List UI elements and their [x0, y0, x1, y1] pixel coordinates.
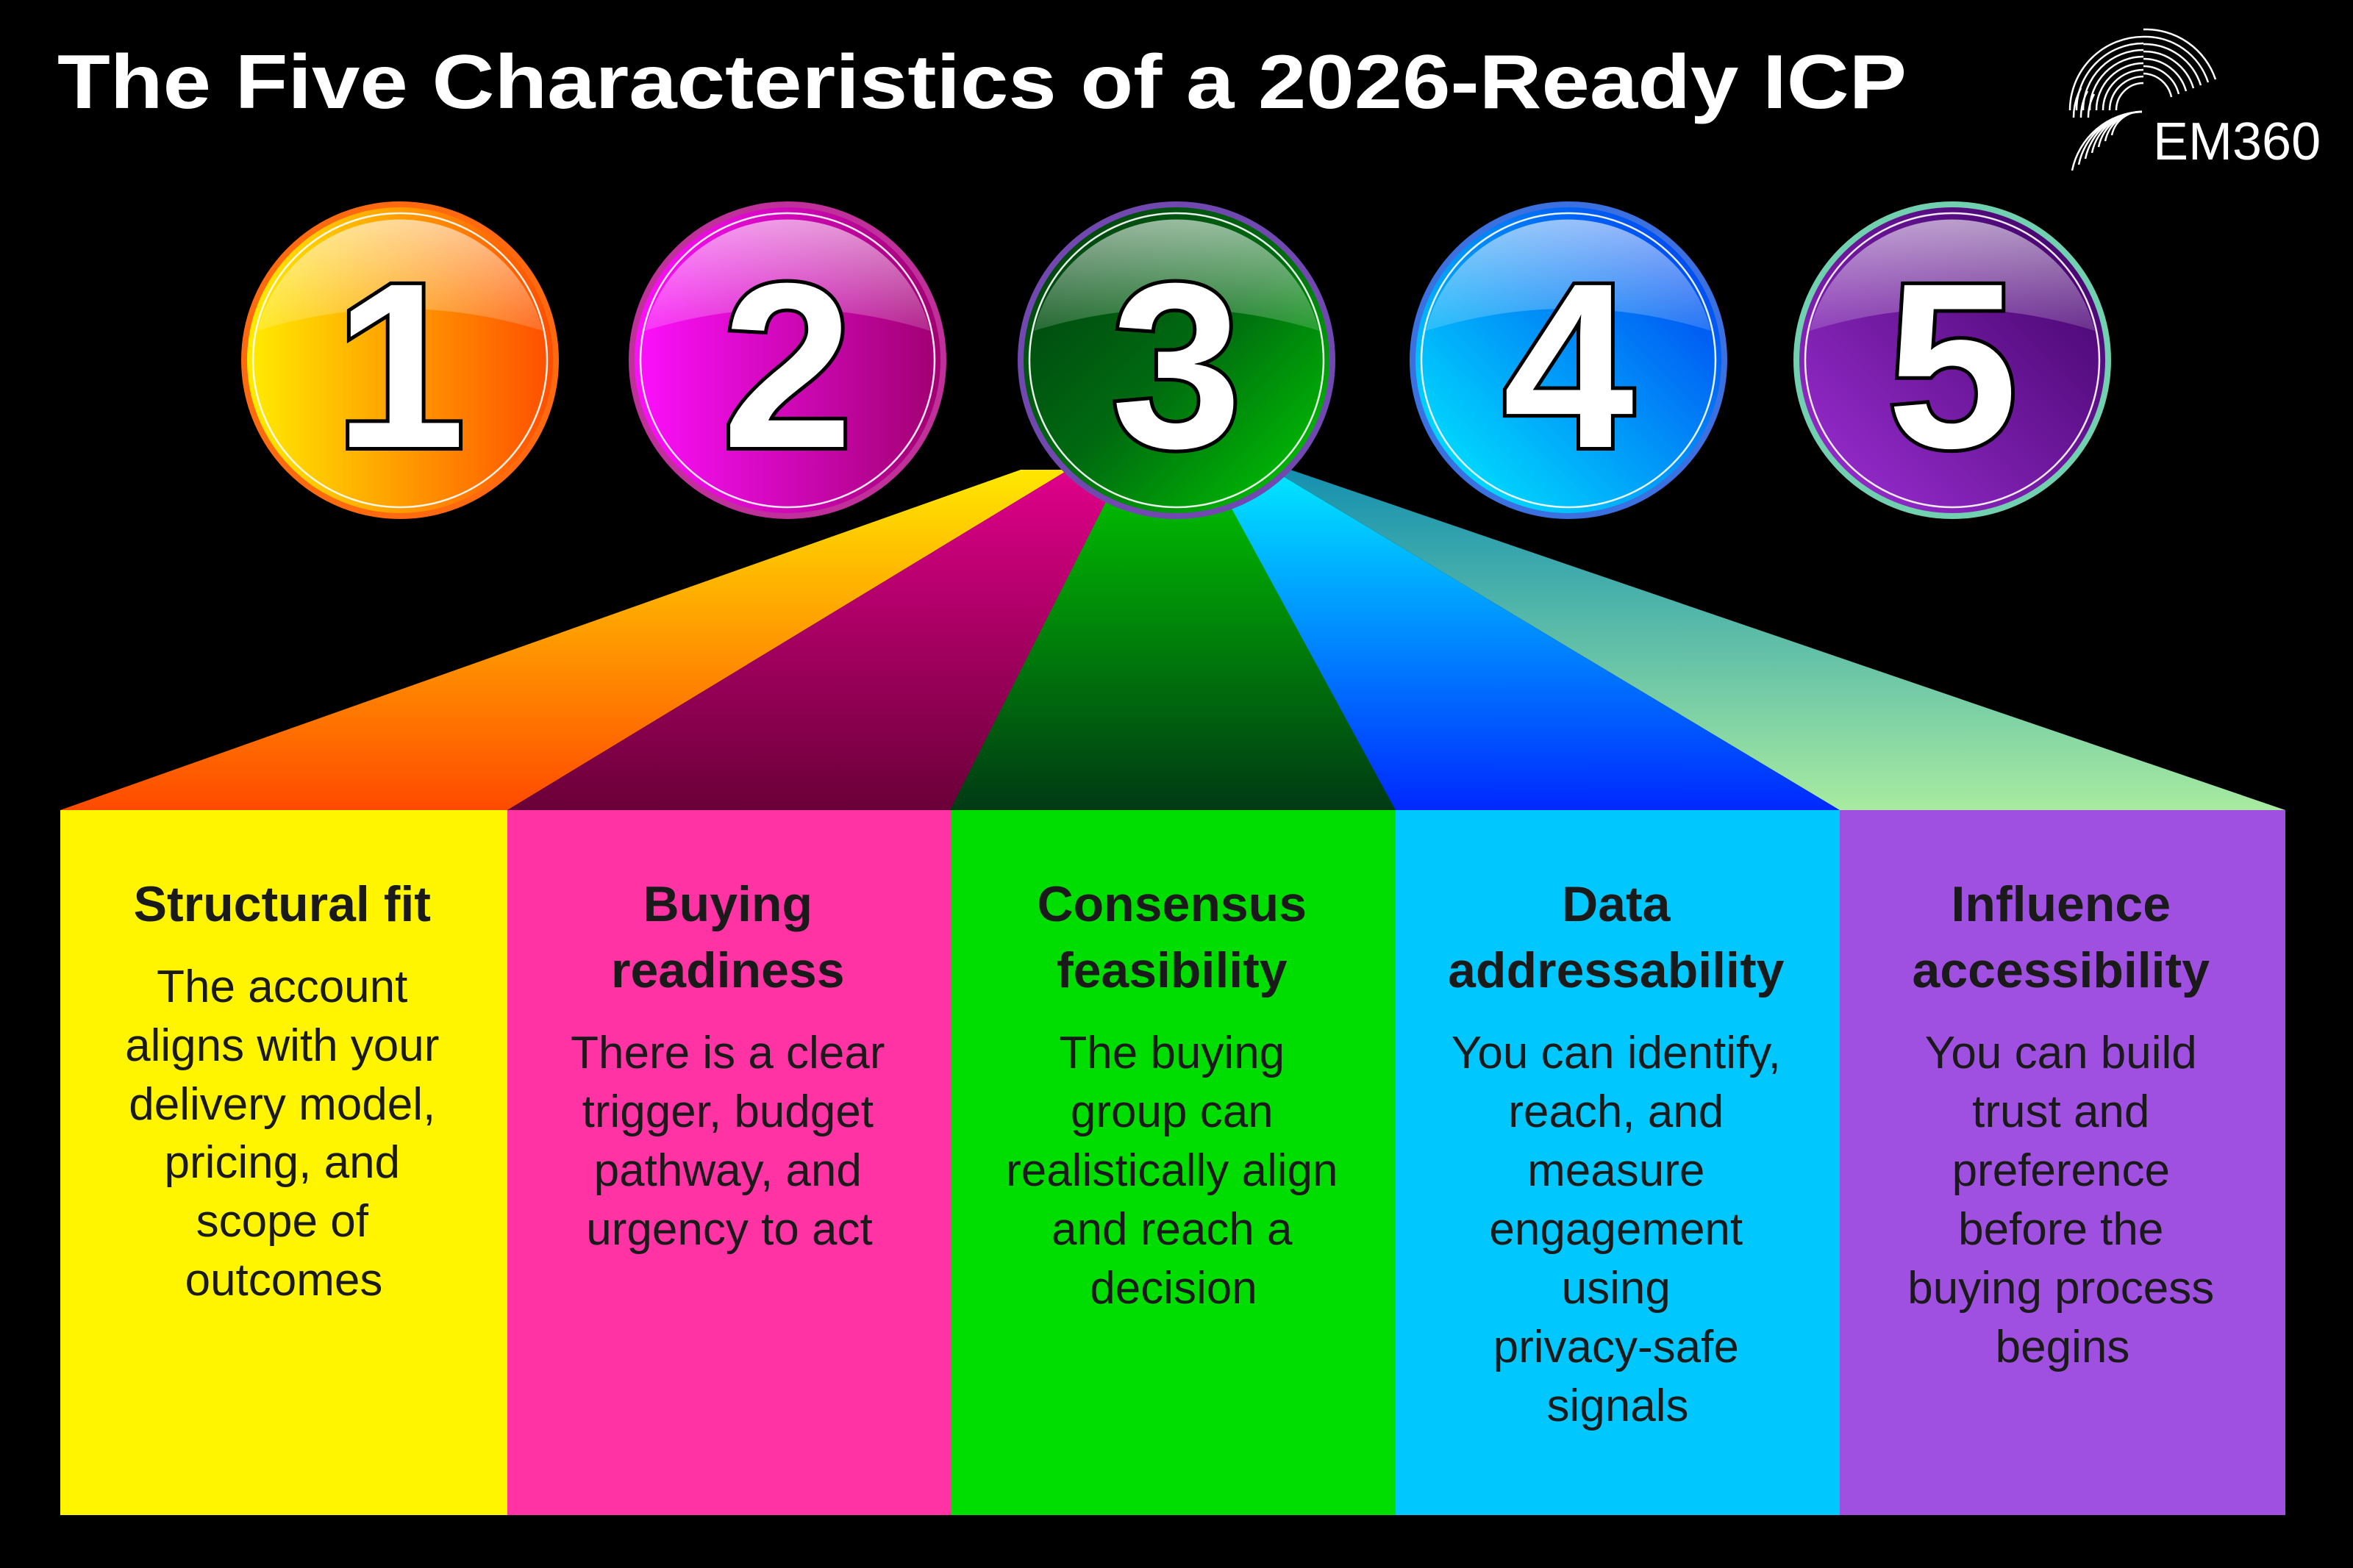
panel 2: Buying readiness: readiness: [611, 942, 845, 998]
panel 1: Structural fit: outcomes: [185, 1255, 382, 1306]
panel 5: Influence accessibility: You can build: [1925, 1028, 2197, 1078]
panel 2: Buying readiness: There is a clear: [571, 1028, 885, 1078]
panel 2: Buying readiness: trigger, budget: [582, 1086, 874, 1137]
panel 1: Structural fit: [60, 810, 507, 1515]
circle 1: 1: [335, 234, 465, 497]
panel 5: Influence accessibility: preference: [1952, 1145, 2170, 1196]
panel 4: Data addressability: measure: [1527, 1145, 1704, 1196]
panel 3: Consensus feasibility: group can: [1071, 1086, 1274, 1137]
circle 1: [244, 204, 556, 516]
panel 4: Data addressability: Data: [1562, 876, 1671, 932]
panel 5: Influence accessibility: begins: [1996, 1322, 2129, 1372]
circle 3: [1021, 204, 1332, 516]
panel 5: Influence accessibility: before the: [1958, 1204, 2163, 1255]
panel 1: Structural fit: delivery model,: [129, 1079, 435, 1130]
beam 2: [507, 470, 1118, 810]
circle 4: [1413, 204, 1724, 516]
panel 2: Buying readiness: Buying: [643, 876, 813, 932]
panel 1: Structural fit: scope of: [196, 1196, 369, 1247]
panel 3: Consensus feasibility: feasibility: [1057, 942, 1288, 998]
panel 3: Consensus feasibility: [951, 810, 1396, 1515]
panel 1: Structural fit: pricing, and: [165, 1137, 400, 1188]
panel 4: Data addressability: privacy-safe: [1493, 1322, 1739, 1372]
panel 3: Consensus feasibility: realistically align: [1006, 1145, 1338, 1196]
panel 4: Data addressability: engagement: [1489, 1204, 1743, 1255]
panel 3: Consensus feasibility: The buying: [1059, 1028, 1285, 1078]
circle 5: [1796, 204, 2108, 516]
panel 3: Consensus feasibility: Consensus: [1038, 876, 1307, 932]
panel 2: Buying readiness: urgency to act: [586, 1204, 873, 1255]
beam 4: [1217, 470, 1840, 810]
beam 3: [950, 482, 1397, 810]
panel 4: Data addressability: signals: [1547, 1381, 1688, 1431]
panel 5: Influence accessibility: buying process: [1907, 1263, 2214, 1314]
panel 2: Buying readiness: [507, 810, 951, 1515]
beam 1: [60, 470, 1068, 810]
panel 5: Influence accessibility: Influence: [1952, 876, 2171, 932]
panel 4: Data addressability: [1396, 810, 1840, 1515]
panel 5: Influence accessibility: accessibility: [1913, 942, 2210, 998]
circle 3: 3: [1111, 234, 1242, 497]
panel 5: Influence accessibility: [1840, 810, 2285, 1515]
beam 5: [1272, 470, 2285, 810]
title: The Five Characteristics of a 2026-Ready ICP: [57, 40, 1907, 125]
logo: EM360: [2070, 29, 2321, 171]
logo: EM360: EM360: [2153, 112, 2321, 171]
panel 1: Structural fit: The account: [157, 962, 407, 1012]
panel 3: Consensus feasibility: decision: [1090, 1263, 1257, 1314]
panel 4: Data addressability: reach, and: [1508, 1086, 1724, 1137]
panel 2: Buying readiness: pathway, and: [594, 1145, 862, 1196]
circle 5: 5: [1887, 234, 2018, 497]
panel 4: Data addressability: using: [1562, 1263, 1671, 1314]
panel 3: Consensus feasibility: and reach a: [1051, 1204, 1293, 1255]
circle 2: 2: [722, 234, 853, 497]
panel 4: Data addressability: You can identify,: [1452, 1028, 1781, 1078]
panel 4: Data addressability: addressability: [1448, 942, 1785, 998]
panel 5: Influence accessibility: trust and: [1972, 1086, 2149, 1137]
panel 1: Structural fit: Structural fit: [134, 876, 431, 932]
circle 4: 4: [1503, 234, 1635, 497]
circle 2: [632, 204, 943, 516]
panel 1: Structural fit: aligns with your: [125, 1020, 439, 1071]
